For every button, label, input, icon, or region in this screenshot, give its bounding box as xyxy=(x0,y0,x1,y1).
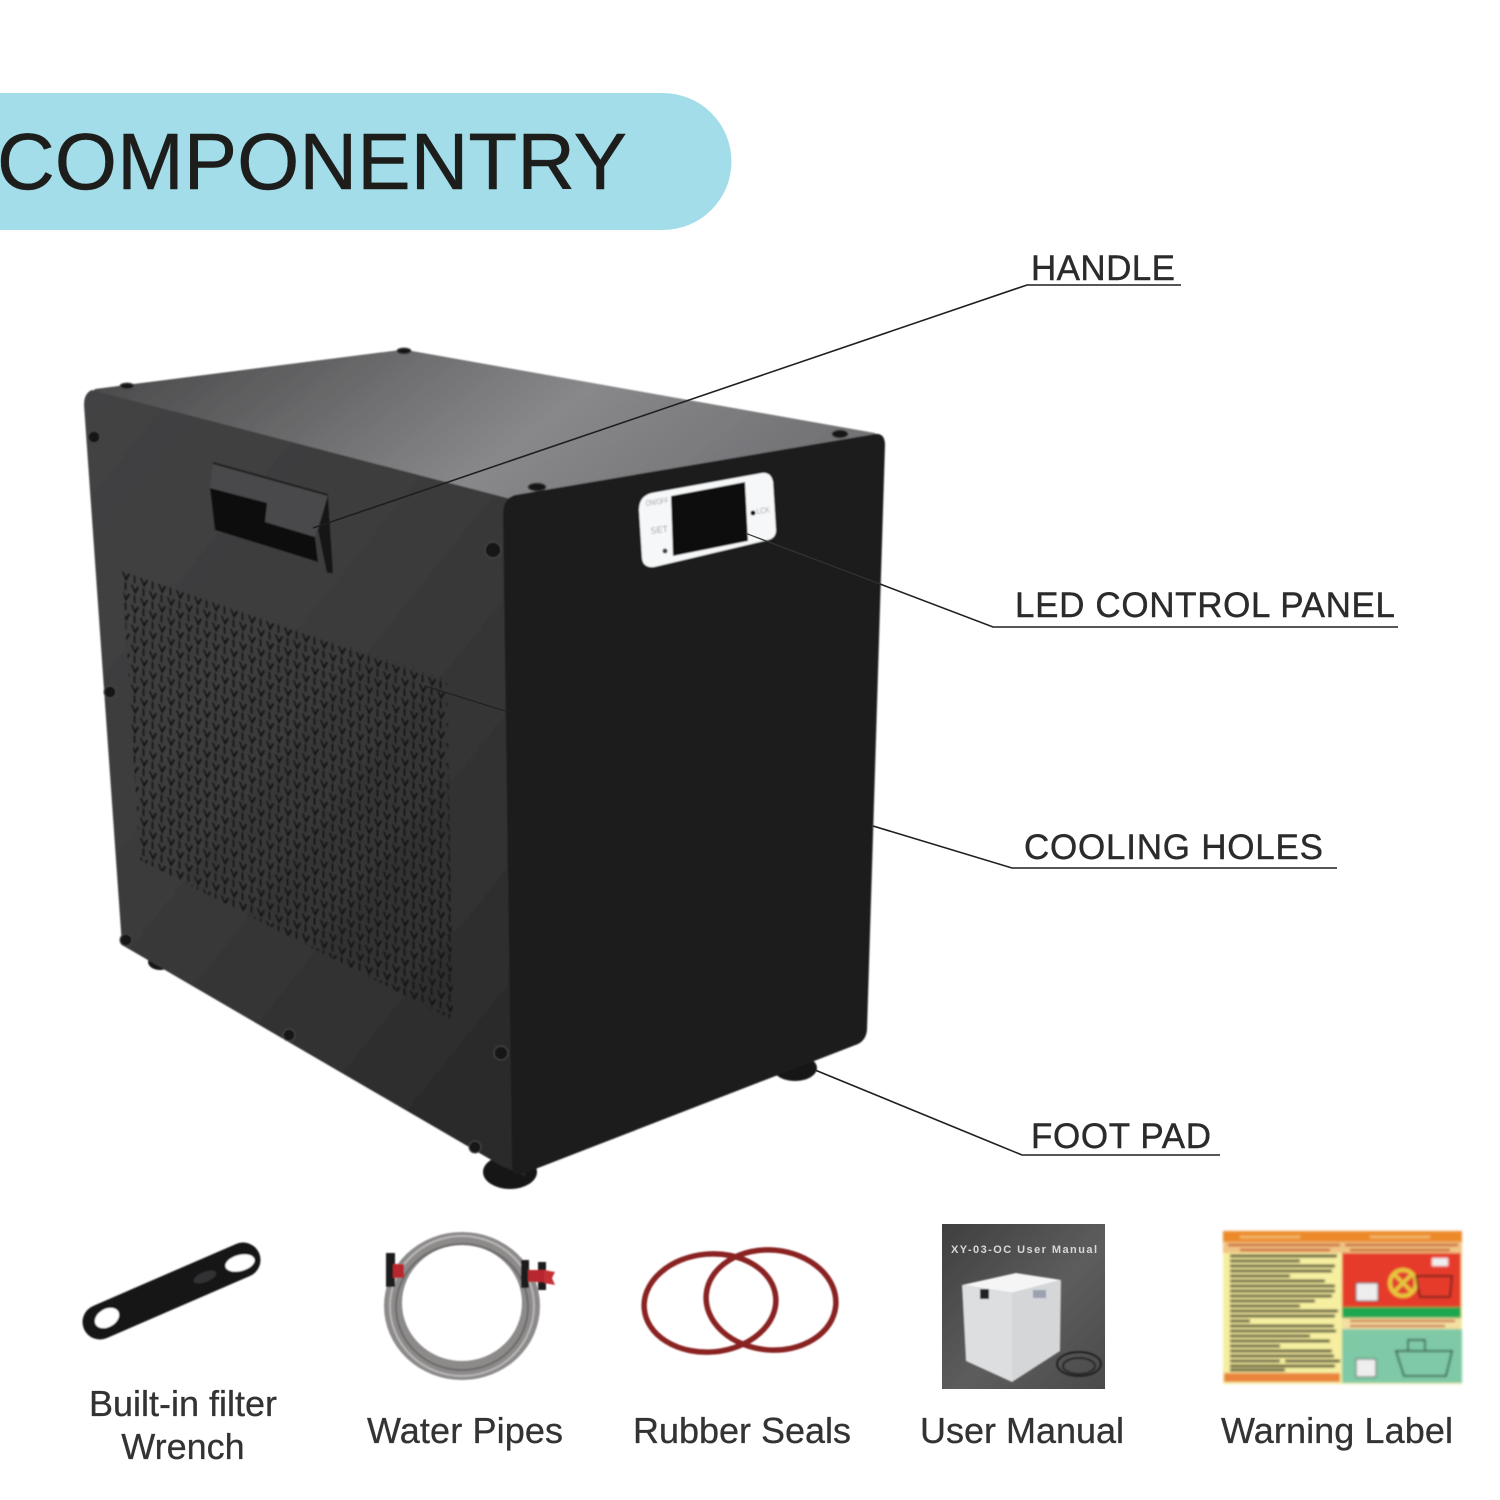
label: LED control panel: LED CONTROL PANEL xyxy=(1015,586,1395,625)
caption: rubber seals: Rubber Seals xyxy=(633,1410,851,1451)
button labels: ON/OFF xyxy=(645,496,669,508)
button labels: SET xyxy=(650,524,669,536)
leader line: cooling holes outer xyxy=(873,826,1337,868)
manual cover xyxy=(942,1224,1105,1389)
leader line: LED control panel outer xyxy=(880,584,1398,627)
label: cooling holes: COOLING HOLES xyxy=(1024,828,1323,867)
label: handle: HANDLE xyxy=(1031,249,1175,288)
front panel xyxy=(503,434,885,1174)
caption: user manual: User Manual xyxy=(920,1410,1124,1451)
title banner xyxy=(0,93,731,230)
caption: warning label: Warning Label xyxy=(1221,1410,1453,1451)
caption: water pipes: Water Pipes xyxy=(367,1410,563,1451)
handle xyxy=(210,463,333,573)
LED control panel xyxy=(639,473,776,567)
accessory: rubber seals xyxy=(640,1245,840,1358)
display screen xyxy=(671,482,748,556)
side panel xyxy=(84,390,525,1176)
leader line: cooling holes xyxy=(425,686,505,711)
button labels: LCK xyxy=(756,505,771,516)
title text: COMPONENTRY xyxy=(0,117,627,206)
manual title: XY-03-OC User Manual xyxy=(951,1244,1097,1256)
label: foot pad: FOOT PAD xyxy=(1031,1117,1211,1156)
teal panel xyxy=(1342,1329,1462,1383)
accessory: wrench xyxy=(91,1251,257,1332)
product: water chiller unit xyxy=(84,348,885,1189)
label text block xyxy=(1230,1256,1340,1370)
label header xyxy=(1223,1231,1462,1242)
cream strip xyxy=(1342,1318,1461,1329)
manual product image xyxy=(962,1273,1101,1382)
leader line: LED control panel xyxy=(745,533,880,584)
screws xyxy=(88,348,848,1153)
leader line: foot pad xyxy=(815,1070,1220,1155)
accessory: user manual xyxy=(942,1224,1105,1389)
feet xyxy=(148,954,817,1189)
red panel xyxy=(1342,1253,1461,1307)
caption: wrench: Built-in filter xyxy=(89,1383,277,1424)
cooling holes xyxy=(122,571,453,1018)
accessory: warning label xyxy=(1223,1231,1462,1384)
banner pill xyxy=(0,93,731,230)
panel body xyxy=(639,473,776,567)
valves xyxy=(386,1253,555,1290)
accessory: water pipes xyxy=(384,1232,555,1380)
leader line: handle xyxy=(313,285,1181,528)
button labels xyxy=(645,496,771,536)
caption: wrench: Wrench xyxy=(121,1426,245,1467)
top panel xyxy=(85,350,885,505)
green strip xyxy=(1342,1307,1461,1318)
